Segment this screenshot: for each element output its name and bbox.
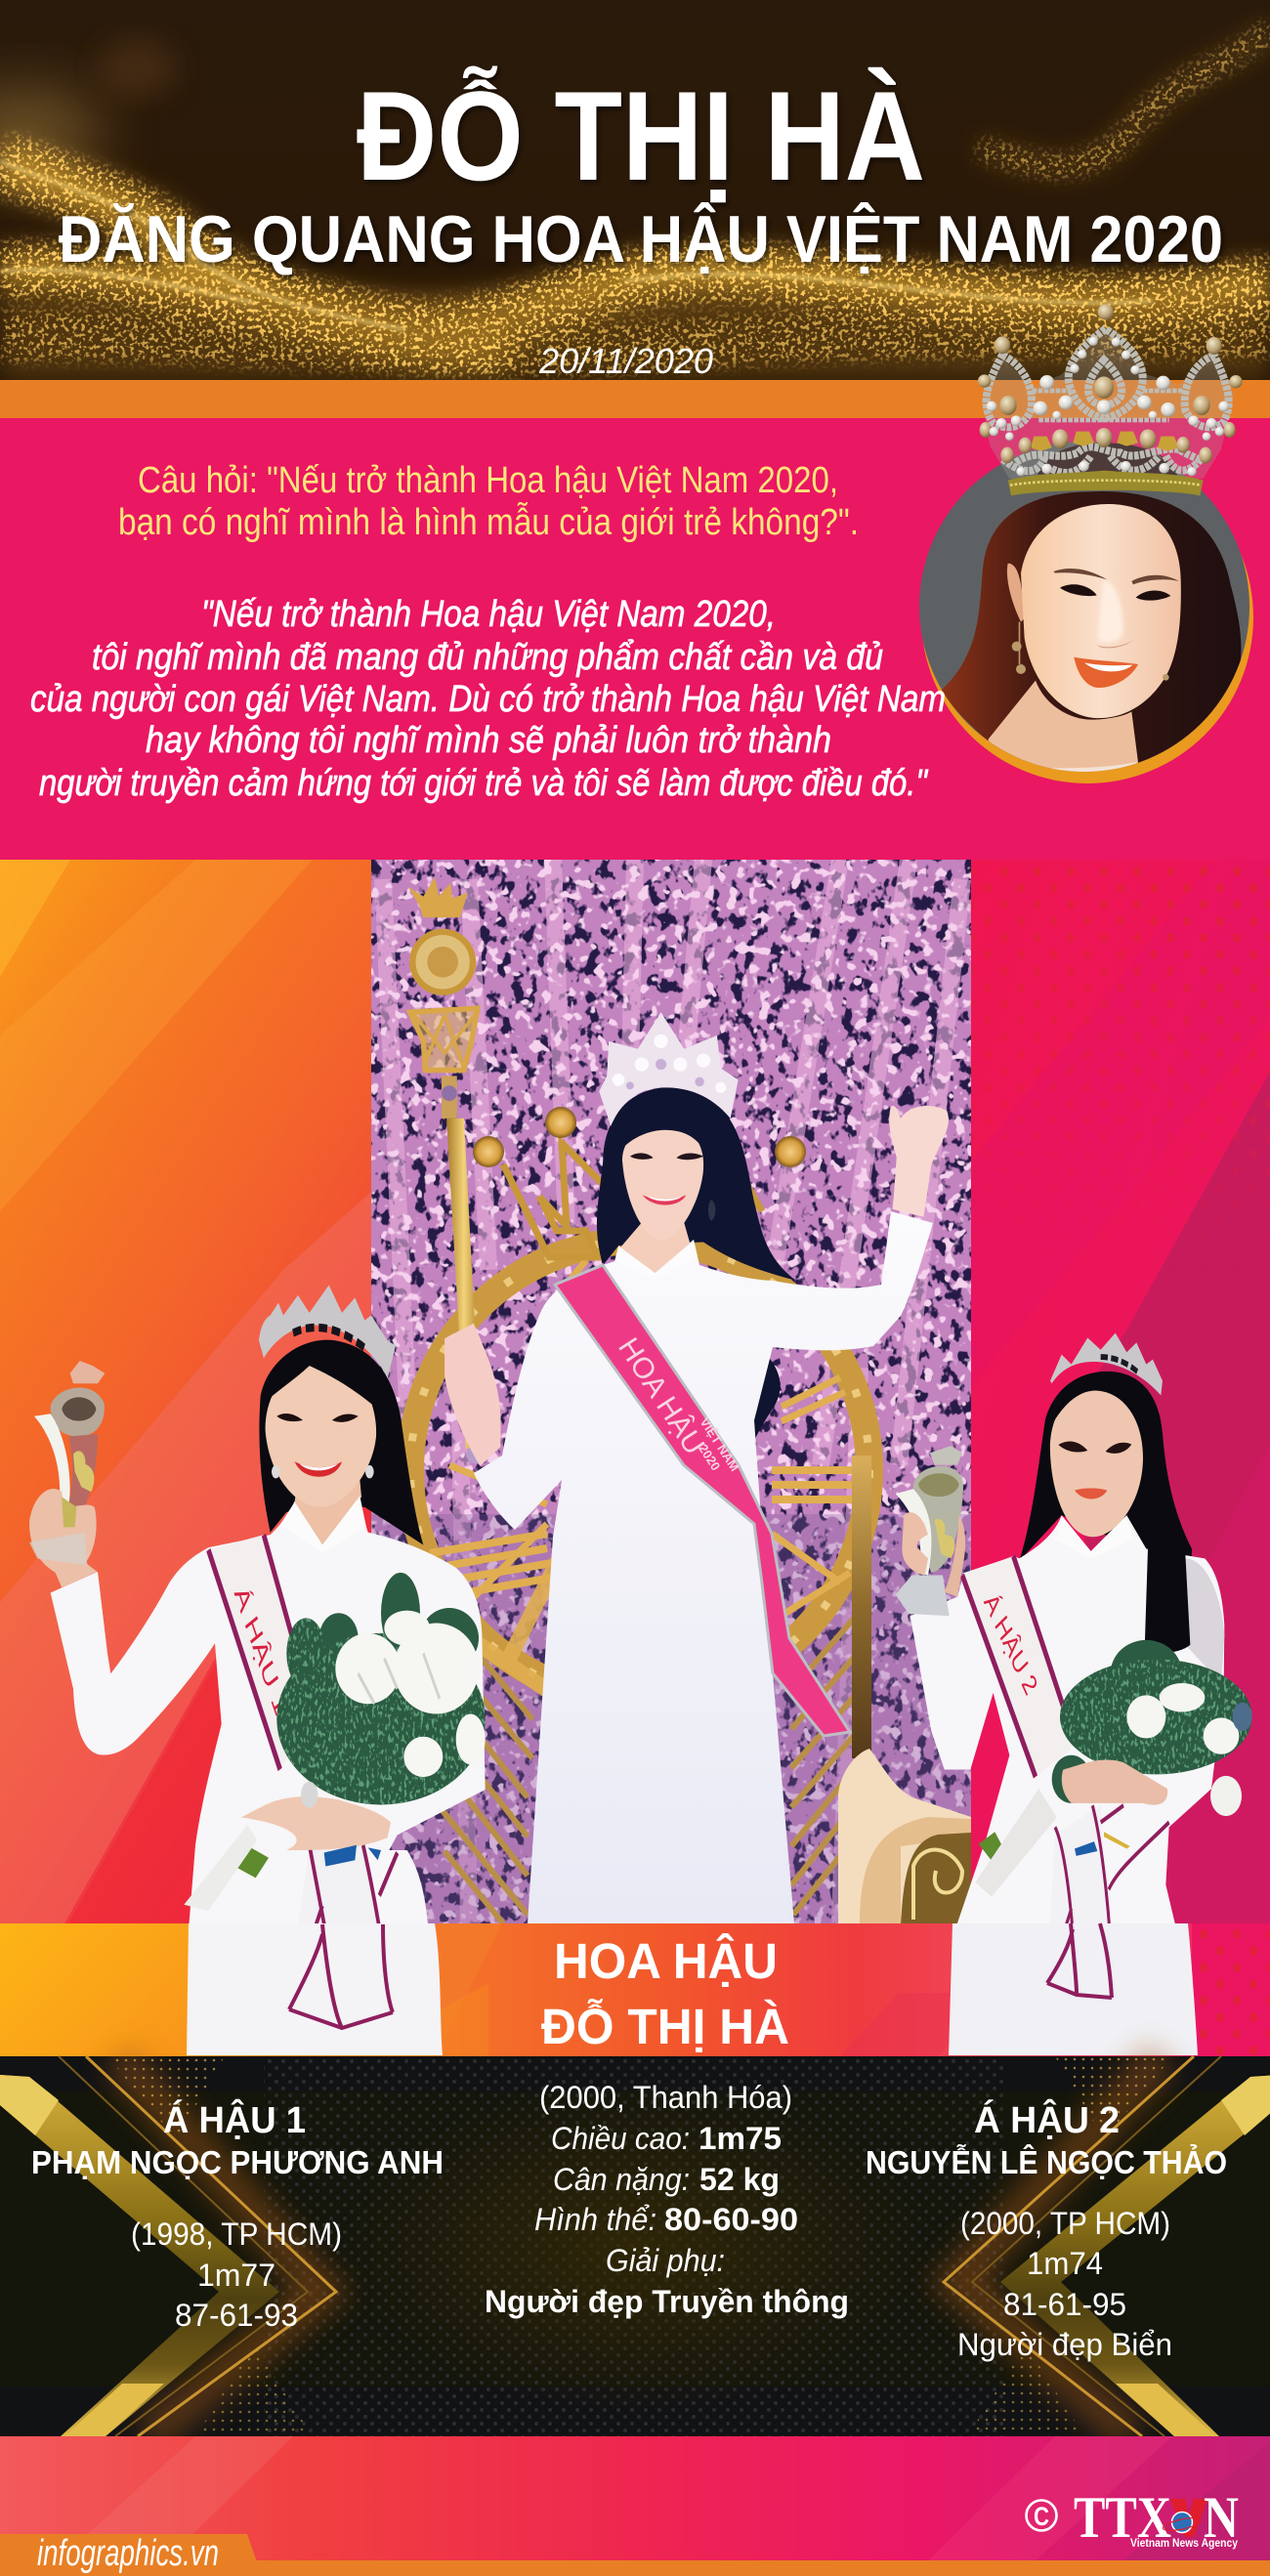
throne: gold wheel, lattice and crown [410, 1107, 871, 1923]
runner-up 1 details [31, 2098, 444, 2333]
pink quote panel [0, 418, 1270, 860]
logo: TTXVN: Vietnam News Agency [1130, 2538, 1239, 2550]
runner-up 1 details: 87-61-93 [175, 2298, 298, 2333]
winner details: (2000, Thanh Hóa) [539, 2080, 792, 2115]
left photo background: orange diagonal [0, 860, 371, 1923]
portrait with orange crescent [919, 442, 1253, 783]
runner-up 1 details: PHẠM NGỌC PHƯƠNG ANH [31, 2144, 444, 2180]
orange stripe [0, 380, 1270, 418]
name heading: Hoa hau Do Thi Ha: ĐỖ THỊ HÀ [541, 1998, 789, 2054]
chair [838, 1749, 971, 1924]
runner-up 2 details: 81-61-95 [1003, 2287, 1126, 2322]
sash text: Hoa hau: HOA HẬU [612, 1332, 710, 1460]
runner-up 2 details: Người đẹp Biển [957, 2327, 1172, 2362]
logo: TTXVN: TTX [1074, 2485, 1171, 2550]
trophy [34, 1361, 105, 1527]
winner details: 1m75 [698, 2121, 782, 2156]
winner details: Chiều cao: [551, 2121, 690, 2156]
name banner background [0, 1923, 1270, 2056]
bouquet [276, 1573, 486, 1804]
trophy [896, 1446, 963, 1616]
name heading: Hoa hau Do Thi Ha: HOA HẬU [554, 1932, 778, 1989]
sceptre [408, 877, 485, 1463]
icon: pearl crown [978, 304, 1243, 495]
second runner-up photo [896, 1333, 1252, 2055]
runner-up 2 details: NGUYỄN LÊ NGỌC THẢO [866, 2144, 1227, 2180]
quote text: người truyền cảm hứng tới giới trẻ và tôi sẽ làm được điều đó." [39, 763, 928, 804]
bouquet [1052, 1640, 1252, 1816]
runner-up 1 details: 1m77 [197, 2258, 275, 2293]
quote text: hay không tôi nghĩ mình sẽ phải luôn trở thành [146, 720, 831, 761]
website credit: infographics.vn [37, 2533, 219, 2574]
redraw lower dresses over banner [187, 1923, 1198, 2055]
winner details: Giải phụ: [606, 2243, 725, 2278]
footer orange strip and tab [0, 2534, 1270, 2576]
date: 20/11/2020 [538, 341, 713, 381]
runner-up 2 details [866, 2098, 1227, 2362]
footer gradient band [0, 2436, 1270, 2560]
runner-up 2 details: Á HẬU 2 [974, 2098, 1120, 2141]
runner-up 1 details: Á HẬU 1 [163, 2098, 306, 2141]
title: ĐỖ THỊ HÀ [357, 64, 925, 207]
quote text: "Nếu trở thành Hoa hậu Việt Nam 2020, [201, 594, 776, 635]
quote text: tôi nghĩ mình đã mang đủ những phẩm chất cần và đủ [92, 637, 883, 678]
sash text: A hau 1: Á HẬU 1 [230, 1581, 292, 1721]
first runner-up photo [29, 1285, 486, 2054]
winner details: Hình thể: [534, 2202, 656, 2237]
question text [118, 460, 859, 543]
winner details: Người đẹp Truyền thông [485, 2284, 849, 2319]
logo: TTXVN [1026, 2485, 1239, 2550]
sash text: Viet Nam 2020 [684, 1415, 742, 1482]
question text: Câu hỏi: "Nếu trở thành Hoa hậu Việt Nam 2020, [138, 460, 838, 501]
logo: TTXVN: C [1034, 2502, 1049, 2531]
header banner: gold dust background [0, 0, 1270, 380]
quote text [30, 594, 946, 804]
winner details: 80-60-90 [664, 2202, 798, 2237]
runner-up 1 details: (1998, TP HCM) [131, 2217, 342, 2252]
runner-up 2 details: (2000, TP HCM) [960, 2206, 1170, 2241]
sash text: Viet Nam 2020: 2020 [696, 1442, 723, 1473]
winner details [485, 2080, 849, 2319]
title [59, 64, 1223, 276]
logo: TTXVN: N [1204, 2485, 1239, 2550]
winner details: 52 kg [699, 2162, 780, 2197]
right photo background: pink diagonal with dots [971, 860, 1270, 1923]
black info band with gold chevrons [0, 2056, 1270, 2436]
question text: bạn có nghĩ mình là hình mẫu của giới trẻ không?". [118, 501, 859, 543]
name heading: Hoa hau Do Thi Ha [541, 1932, 789, 2054]
sash text: A hau 2: Á HẬU 2 [980, 1586, 1042, 1701]
center winner: Hoa hau [444, 1012, 949, 1923]
center photo: glittering stage [371, 860, 971, 1923]
quote text: của người con gái Việt Nam. Dù có trở thành Hoa hậu Việt Nam [30, 679, 946, 720]
winner details: Cân nặng: [553, 2162, 690, 2197]
runner-up 2 details: 1m74 [1027, 2246, 1103, 2281]
sash text: Viet Nam 2020: VIỆT NAM [697, 1415, 742, 1474]
